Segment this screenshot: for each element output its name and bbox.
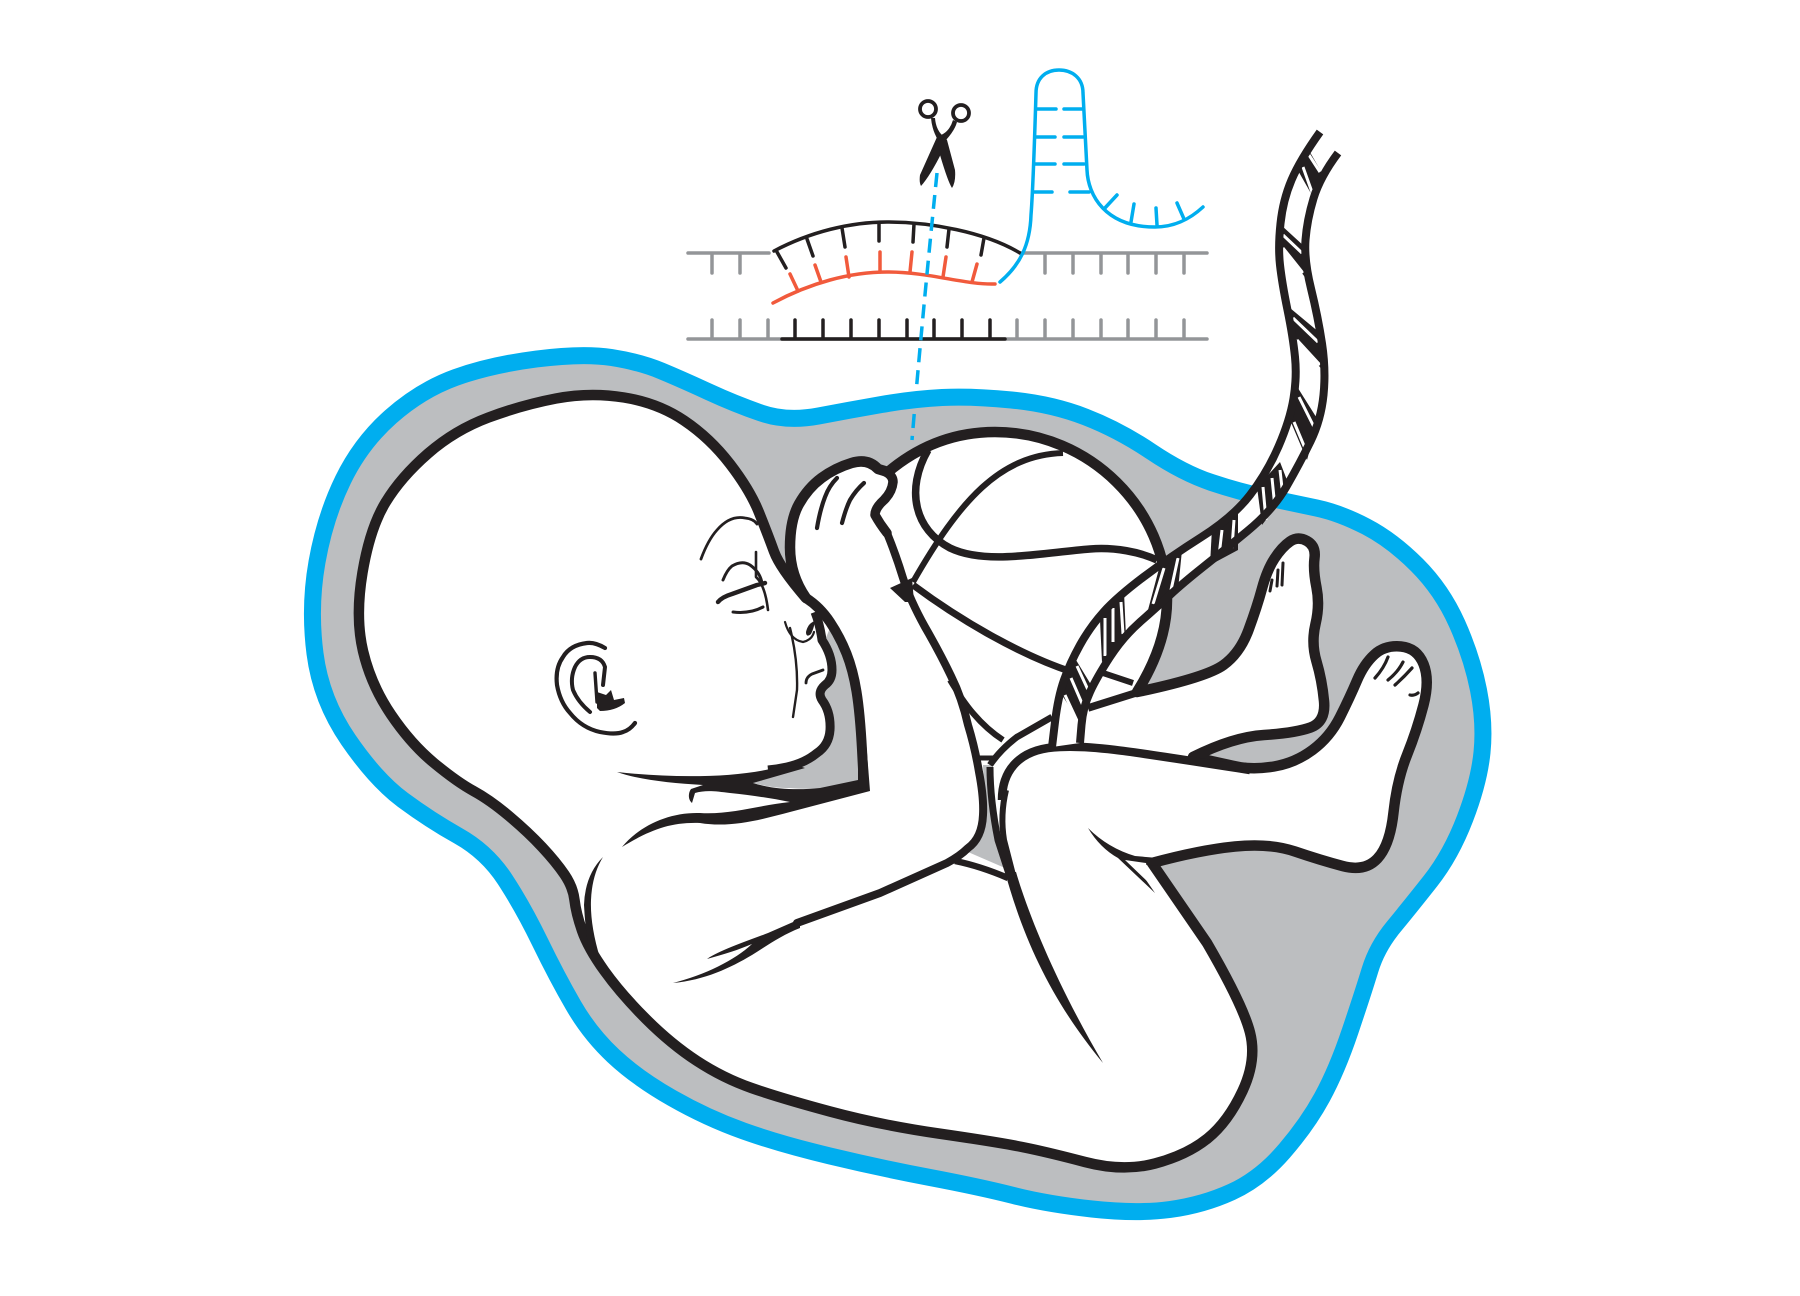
grey pocket between chin and upper arm	[753, 628, 864, 789]
face, chin and neck profile	[617, 612, 870, 847]
back leg top line left of the cord	[1088, 691, 1142, 708]
hand and fingers	[817, 469, 893, 533]
target DNA section in black	[774, 222, 1020, 339]
chin, shoulder and arm crease	[617, 740, 870, 847]
icon: scissors	[920, 101, 969, 188]
arrow: dashed blue line from scissors to fetus	[912, 173, 937, 440]
panel: womb with blue outline and grey fluid	[312, 356, 1483, 1212]
guide RNA in red	[773, 252, 995, 303]
toes	[1270, 563, 1418, 695]
cord hatching	[1060, 147, 1324, 726]
thigh, knee and hip lines	[955, 717, 1250, 1063]
fetus body outline: head, back, legs, feet, hand and belly	[359, 395, 1427, 1167]
lines across the belly	[913, 450, 1157, 740]
umbilical cord	[1052, 132, 1338, 747]
forearm with barb and lower arm line	[673, 533, 983, 983]
facial details: brow, eye, nose, mouth	[701, 518, 823, 717]
icon: ear	[557, 643, 635, 734]
DNA strands in grey	[688, 253, 1207, 339]
cord strands	[1052, 132, 1338, 747]
spur at the hip	[584, 857, 603, 958]
upper arm line from wrist to elbow	[806, 598, 864, 788]
grey pocket between arm and thigh	[968, 765, 1005, 868]
guide RNA hairpin in blue	[1000, 70, 1203, 282]
knee crease behind leg	[1088, 828, 1158, 893]
